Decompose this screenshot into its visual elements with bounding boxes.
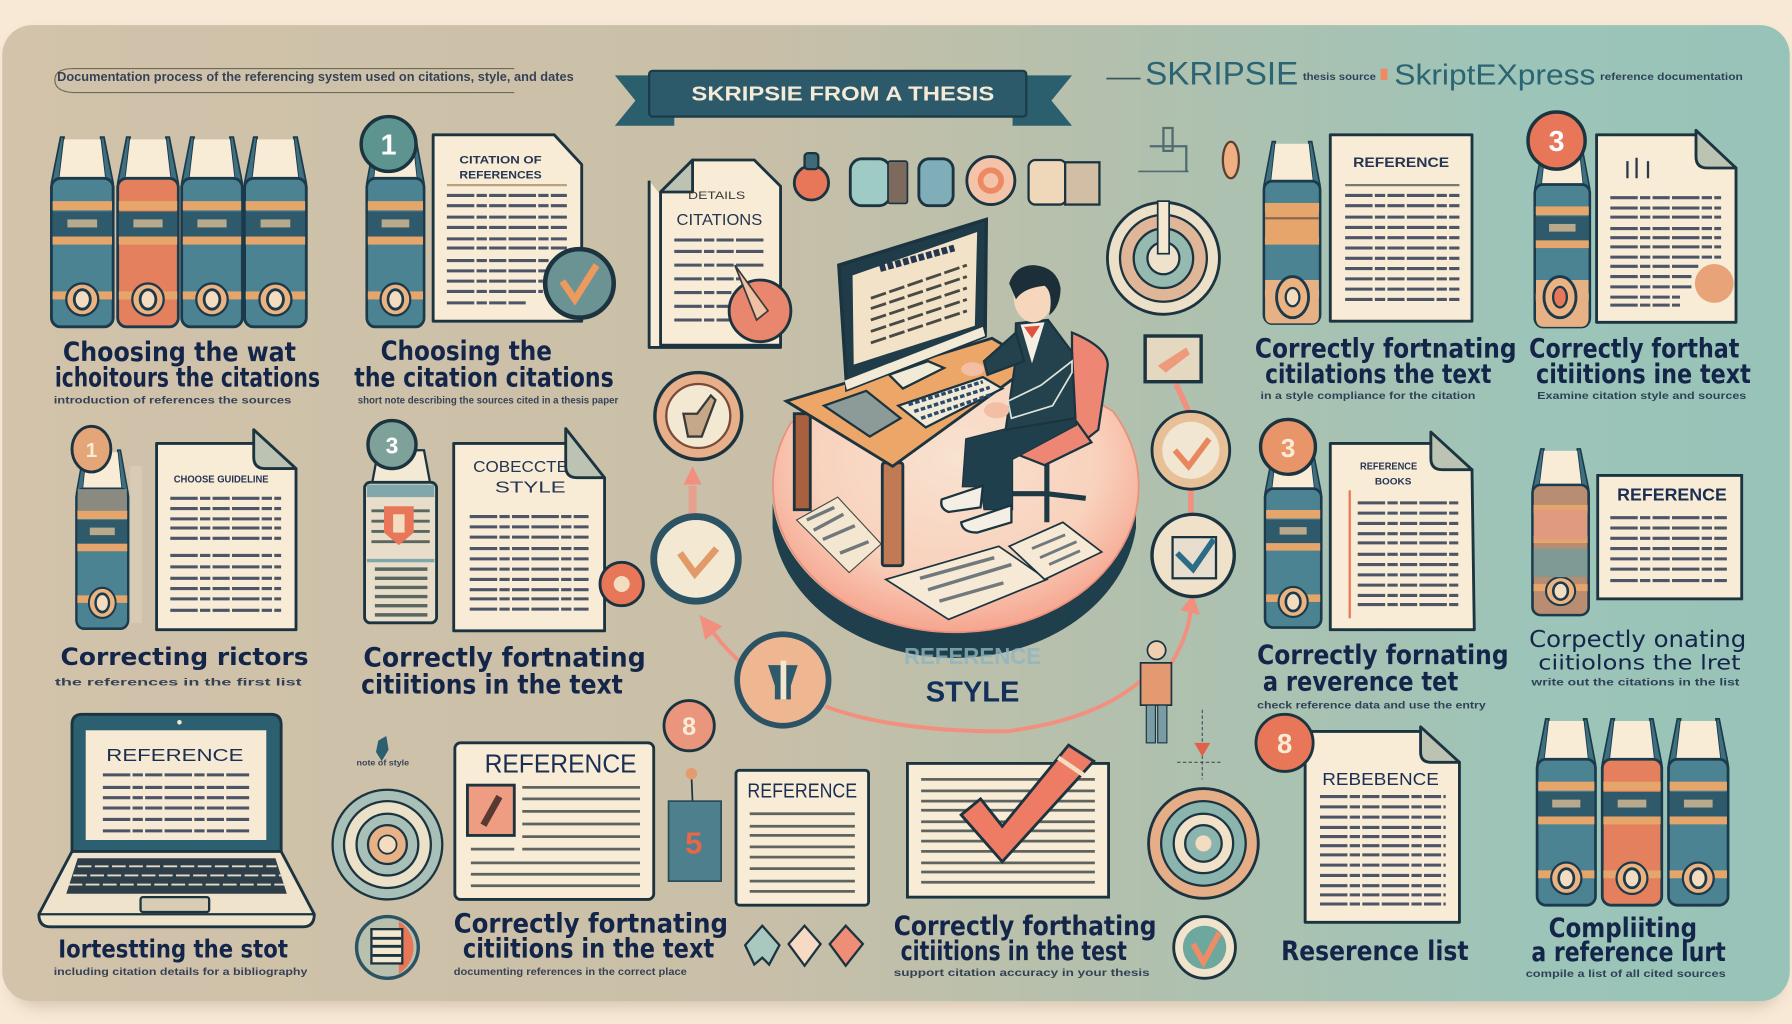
- caption: correctly formatting bottom: Correctly fortnating: [454, 910, 728, 940]
- scene: person at desk on platform: [773, 219, 1139, 658]
- text: reference style: STYLE: [926, 677, 1019, 709]
- caption: correctly format top right 2: Examine citation style and sources: [1537, 391, 1747, 402]
- monitor: [839, 219, 986, 390]
- panel: reference small card: [736, 770, 869, 905]
- caption: correctly creating: Corpectly onating: [1529, 627, 1746, 653]
- caption: correctly formatting bottom: citiitions in the text: [463, 935, 714, 965]
- caption: formatting the start: including citation details for a bibliography: [54, 967, 308, 978]
- badge: number 1: [361, 117, 416, 171]
- caption: correctly formatting: citiitions in the text: [361, 671, 623, 701]
- caption: correctly creating: ciitiolons the lret: [1538, 651, 1741, 675]
- person torso and head: [961, 265, 1075, 430]
- icon: check circle bottom: [1174, 917, 1235, 978]
- caption: correctly formatting: Correctly fortnating: [363, 643, 646, 673]
- panel: reference list document: 8: [1277, 728, 1292, 759]
- book and keyboard on desk: [824, 377, 1002, 437]
- panel: step 3 middle right: 3: [1281, 433, 1295, 463]
- caption: correctly formatting bottom: [454, 910, 728, 978]
- panel: correcting book and document: 1: [86, 439, 97, 462]
- panel: step 3 book and document: [365, 421, 643, 631]
- caption: correctly forthating: [894, 912, 1157, 979]
- panel: reference small card: REFERENCE: [747, 780, 857, 803]
- icon: small pencil box: [1145, 336, 1201, 382]
- caption: correctly forthating: support citation accuracy in your thesis: [894, 968, 1150, 979]
- icon: three diamonds: [745, 926, 863, 966]
- icon: target left: [333, 790, 442, 899]
- caption: correctly formatting a reverence: a reverence tet: [1263, 667, 1458, 697]
- panel: top right book and document: REFERENCE: [1353, 155, 1449, 170]
- panel: reference list document: [1256, 714, 1459, 922]
- header strip left: Documentation process of the referencing system used on citations, style, and dates: [57, 70, 574, 84]
- caption: compiling a reference list: compile a list of all cited sources: [1526, 969, 1726, 980]
- text: reference style: REFERENCE: [904, 643, 1041, 669]
- caption: correctly formatting top right: in a style compliance for the citation: [1261, 391, 1475, 402]
- panel: step 3 book and document: STYLE: [495, 480, 566, 497]
- caption: compiling a reference list: [1526, 914, 1726, 980]
- caption: choosing the citation: the citation citations: [354, 363, 614, 393]
- legs and shoes: [941, 411, 1077, 533]
- panel: citation document centre: DETAILS: [688, 190, 746, 202]
- icon: small pin: [1177, 710, 1223, 779]
- caption: correcting rictors: the references in the first list: [55, 678, 303, 689]
- caption: formatting the start: [54, 935, 308, 978]
- panel: step 3 middle right: [1261, 419, 1474, 630]
- panel: correcting book and document: [72, 426, 296, 630]
- icon: check right upper: [1152, 411, 1230, 489]
- icon: small person: [1141, 641, 1171, 743]
- caption: compiling a reference list: Compliiting: [1549, 914, 1697, 944]
- panel: step 3 middle right: REFERENCE: [1360, 462, 1417, 473]
- caption: correctly formatting top right: citilations the text: [1265, 360, 1491, 390]
- panel: top right book and document: [1264, 135, 1472, 324]
- icon: small list circle: [357, 917, 418, 978]
- chair: [1011, 333, 1108, 522]
- title ribbon: SKRIPSIE FROM A THESIS: [691, 83, 994, 106]
- caption: correctly formatting top right: [1255, 335, 1517, 402]
- papers on floor: [797, 497, 1102, 619]
- caption: correctly formatting bottom: documenting references in the correct place: [454, 967, 687, 978]
- header brand right: thesis source: [1303, 72, 1376, 83]
- panel: laptop: REFERENCE: [106, 745, 243, 765]
- panel: correcting book and document: CHOOSE GUIDELINE: [174, 474, 269, 485]
- caption: correctly forthating: Correctly forthating: [894, 912, 1157, 942]
- badge: small number: [664, 701, 714, 751]
- panel: step 3 top right: [1528, 112, 1736, 327]
- panel: laptop: [39, 714, 314, 927]
- panel: reference card: REFERENCE: [485, 749, 637, 779]
- panel: reference card: [455, 743, 654, 899]
- icons: top row: [794, 153, 1099, 206]
- caption: correctly forthating: citiitions in the test: [901, 937, 1127, 967]
- caption: choosing the citation: [354, 337, 618, 406]
- caption: correctly format top right 2: citiitions ine text: [1536, 360, 1751, 390]
- caption: correctly formatting a reverence: Correctly fornating: [1257, 641, 1509, 671]
- icon: checkbox left upper: [655, 373, 742, 459]
- header brand right: SkriptEXpress: [1394, 60, 1595, 92]
- panel: reference list document: REBEBENCE: [1322, 769, 1439, 789]
- caption: reference list: Reserence list: [1281, 937, 1469, 967]
- caption: choosing the way: introduction of references the sources: [54, 395, 292, 406]
- header brand right: reference documentation: [1600, 72, 1743, 83]
- caption: choosing the citation: short note describing the sources cited in a thesis paper: [358, 395, 618, 406]
- panel: step 3 book and document: 3: [386, 433, 398, 459]
- panel: big check card: [907, 745, 1109, 897]
- icon: funnel: [737, 634, 829, 726]
- panel: step 1 book and document: CITATION OF: [459, 154, 542, 166]
- panel: four books top left: [51, 137, 306, 327]
- caption: correctly formatting a reverence: check reference data and use the entry: [1257, 701, 1486, 712]
- icon: tag with 5: 5: [685, 826, 702, 861]
- icon: small marker: note of style: [357, 759, 410, 768]
- caption: correctly format top right 2: [1529, 335, 1751, 402]
- text: reference style: [904, 643, 1041, 709]
- icon: target right: [1149, 789, 1258, 898]
- caption: choosing the way: Choosing the wat: [63, 338, 296, 368]
- header strip left: [55, 69, 574, 93]
- panel: step 3 middle right: BOOKS: [1375, 477, 1411, 487]
- caption: formatting the start: Iortestting the stot: [58, 935, 288, 964]
- panel: book and landscape reference: REFERENCE: [1617, 485, 1727, 505]
- caption: choosing the way: [54, 338, 320, 406]
- badge: small number: 8: [682, 713, 696, 741]
- caption: correctly formatting a reverence: [1257, 641, 1509, 712]
- header brand right: SKRIPSIE: [1145, 56, 1298, 92]
- title ribbon: [615, 71, 1072, 126]
- icon: target top: [1107, 201, 1219, 314]
- diagram: arrows around the desk: [683, 384, 1200, 731]
- caption: correctly formatting top right: Correctly fortnating: [1255, 335, 1517, 365]
- icon: check right lower: [1152, 514, 1234, 597]
- panel: step 1 book and document: [361, 117, 614, 327]
- desk: [786, 338, 1034, 566]
- panel: book and landscape reference: [1532, 449, 1742, 615]
- panel: step 1 book and document: REFERENCES: [459, 169, 542, 181]
- panel: citation document centre: CITATIONS: [677, 212, 762, 229]
- caption: correctly formatting: [361, 643, 646, 701]
- header brand right: [1106, 56, 1743, 92]
- caption: correcting rictors: [55, 643, 309, 689]
- panel: three books bottom right: [1537, 719, 1728, 905]
- caption: correctly creating: [1529, 627, 1746, 689]
- caption: correcting rictors: Correcting rictors: [61, 643, 309, 671]
- caption: choosing the way: ichoitours the citations: [55, 363, 320, 393]
- caption: correctly creating: write out the citations in the list: [1530, 678, 1740, 689]
- caption: choosing the citation: Choosing the: [381, 337, 552, 367]
- icon: tag with 5: [669, 768, 721, 881]
- panel: step 3 top right: 3: [1549, 126, 1565, 158]
- icons: small top right marks: [1138, 128, 1239, 178]
- caption: correctly format top right 2: Correctly forthat: [1529, 335, 1739, 365]
- badge: number 1: 1: [381, 129, 397, 161]
- panel: step 3 book and document: COBECCTE: [473, 459, 568, 476]
- caption: compiling a reference list: a reference lurt: [1531, 938, 1726, 968]
- icon: check left lower: [654, 517, 738, 601]
- icon: small marker: [357, 736, 410, 768]
- platform: [773, 343, 1139, 658]
- panel: citation document centre: [649, 160, 791, 347]
